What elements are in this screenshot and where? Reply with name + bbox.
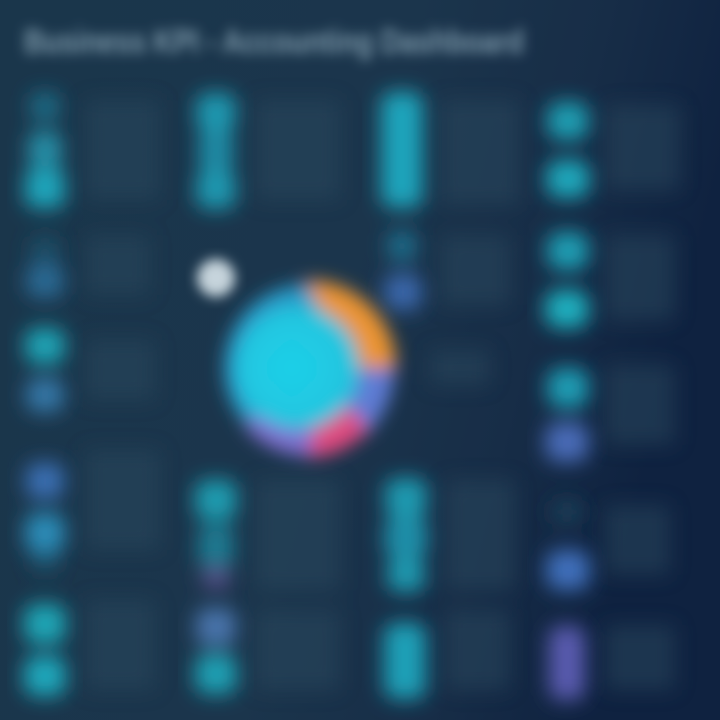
column 2 icons [195, 93, 237, 694]
title: Business KPI - Accounting Dashboard [24, 23, 524, 61]
icon: column 1 row 2 [26, 236, 64, 298]
pie chart [224, 280, 396, 458]
text block: column 1 [85, 100, 160, 690]
icon: column 1 row 5 [24, 604, 66, 696]
icon: column 1 row 1 [25, 92, 65, 208]
pie segment: orange [306, 280, 396, 368]
icon: white circle [197, 259, 235, 297]
icon: column 2 row 4 [195, 480, 237, 588]
pie segment: pink [310, 402, 368, 458]
icon: column 4 row 3 [545, 368, 589, 462]
icon: column 3 row 2 [384, 230, 422, 310]
column 1 icons [24, 92, 66, 696]
text block: column 2 [255, 100, 340, 690]
icon: column 3 row 1 [381, 92, 423, 208]
icon: column 1 row 4 [25, 463, 65, 573]
pie segment: purple [244, 395, 316, 456]
icon: column 2 row 5 [195, 608, 237, 694]
icon: column 4 row 5 [549, 626, 585, 700]
icon: column 4 row 1 [546, 102, 590, 198]
pie segment: blue purple [335, 368, 394, 436]
icon: column 3 row 4 [384, 478, 428, 592]
text block: column 4 [605, 105, 680, 690]
pie core: cyan [236, 306, 360, 430]
icon: column 4 row 4 [546, 500, 590, 590]
pie base: blue [224, 284, 392, 452]
icon: column 1 row 3 [25, 328, 65, 412]
text blocks [85, 100, 680, 690]
column 3 icons [381, 92, 428, 699]
icon: column 2 row 1 [196, 93, 236, 209]
column 4 icons [545, 102, 590, 700]
icon: column 4 row 2 [545, 232, 589, 328]
icon: column 3 row 5 [384, 623, 426, 699]
text block: column 3 [430, 100, 520, 690]
